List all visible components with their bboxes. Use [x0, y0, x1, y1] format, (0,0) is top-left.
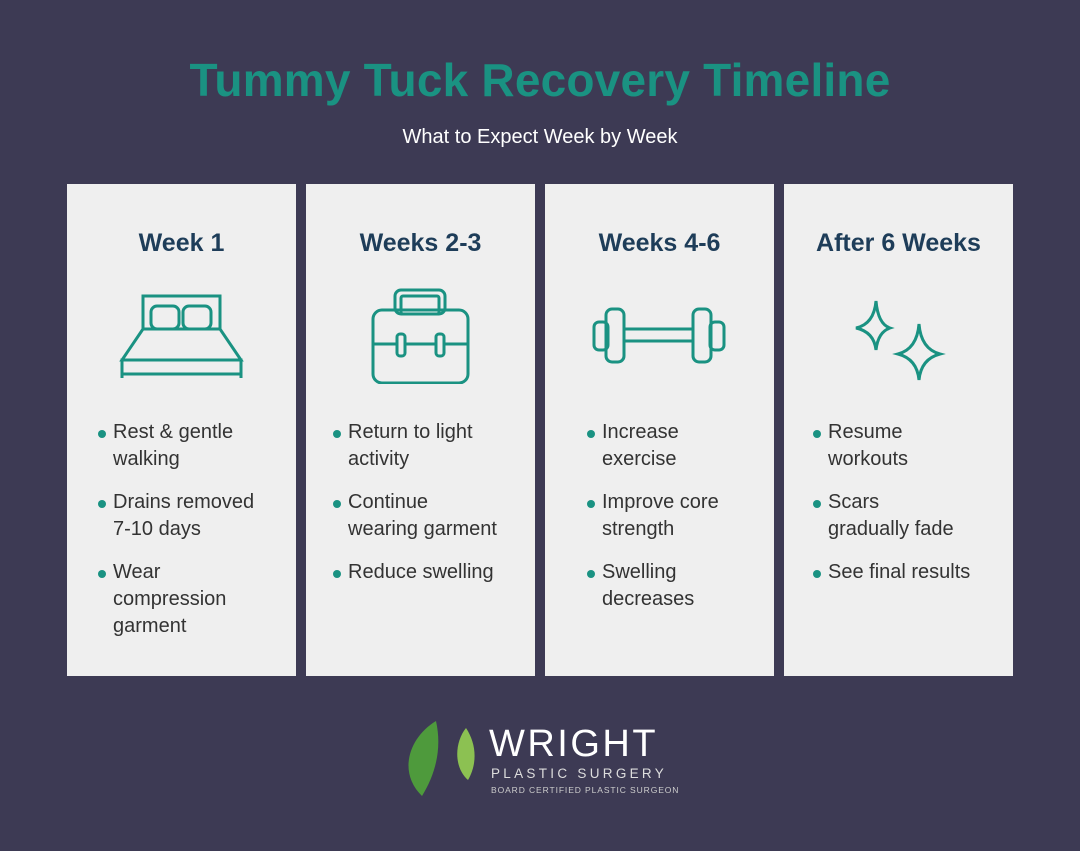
bullet list: decreases — [602, 588, 694, 610]
icon: dumbbell — [592, 308, 726, 364]
icon: bed — [119, 294, 244, 378]
bullet list: garment — [113, 615, 186, 637]
bullet list: walking — [113, 448, 180, 470]
logo: BOARD CERTIFIED PLASTIC SURGEON — [491, 785, 679, 795]
bullet list: Swelling — [602, 561, 676, 583]
bullet list: 7-10 days — [113, 518, 201, 540]
bullet list: Resume — [828, 421, 902, 443]
bullet list — [333, 421, 497, 583]
logo — [408, 721, 679, 796]
bullet list: compression — [113, 588, 226, 610]
panel: week 1: Week 1 — [139, 229, 224, 257]
bullet list: exercise — [602, 448, 676, 470]
logo: PLASTIC SURGERY — [491, 766, 667, 781]
title: Tummy Tuck Recovery Timeline — [190, 54, 890, 106]
panel: weeks 4-6 — [545, 184, 774, 676]
bullet list: workouts — [828, 448, 908, 470]
icon: leaves — [408, 721, 475, 796]
panel: weeks 2-3 — [306, 184, 535, 676]
icon: briefcase — [372, 288, 470, 384]
bullet list — [813, 421, 970, 583]
bullet list: Increase — [602, 421, 679, 443]
panel: week 1 — [67, 184, 296, 676]
bullet list: Scars — [828, 491, 879, 513]
panel: weeks 2-3: Weeks 2-3 — [360, 229, 481, 257]
icon: sparkles — [856, 300, 946, 380]
bullet list: Wear — [113, 561, 160, 583]
bullet list — [98, 421, 254, 637]
bullet list: See final results — [828, 561, 970, 583]
bullet list: Rest & gentle — [113, 421, 233, 443]
bullet list: Drains removed — [113, 491, 254, 513]
panel: after 6 weeks: After 6 Weeks — [816, 229, 981, 257]
bullet list: wearing garment — [348, 518, 497, 540]
bullet list: gradually fade — [828, 518, 954, 540]
bullet list: Reduce swelling — [348, 561, 494, 583]
bullet list: Return to light — [348, 421, 473, 443]
panel: after 6 weeks — [784, 184, 1013, 676]
subtitle: What to Expect Week by Week — [403, 126, 677, 148]
bullet list: activity — [348, 448, 409, 470]
logo text: WRIGHT — [489, 723, 658, 765]
bullet list: strength — [602, 518, 674, 540]
bullet list: Continue — [348, 491, 428, 513]
bullet list — [587, 421, 719, 610]
panel: weeks 4-6: Weeks 4-6 — [599, 229, 720, 257]
bullet list: Improve core — [602, 491, 719, 513]
